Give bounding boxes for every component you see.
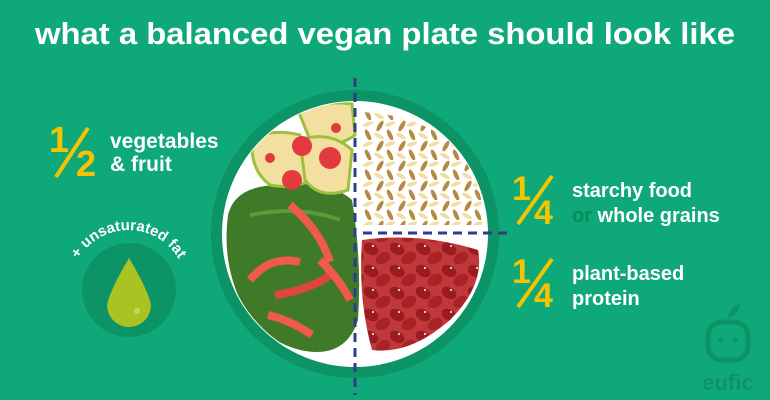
label: half vegetables <box>49 119 219 184</box>
spinach and peppers <box>226 184 359 352</box>
icon: unsaturated fat drop <box>72 221 186 337</box>
plate <box>211 78 510 395</box>
grains quadrant <box>362 112 482 225</box>
fruit <box>252 103 355 193</box>
label: starchy food: 1 <box>512 170 531 208</box>
beans quadrant <box>361 238 479 351</box>
label: half vegetables: 1 <box>49 119 69 160</box>
label: half vegetables: 2 <box>76 143 96 184</box>
logo: eufic <box>702 304 754 395</box>
label: starchy food: or whole grains <box>572 205 720 227</box>
logo: eufic: eufic <box>702 370 754 395</box>
label: plant-based protein <box>512 253 684 315</box>
divider lines <box>355 78 510 395</box>
label: half vegetables: vegetables <box>110 130 219 153</box>
label: starchy food <box>512 170 720 232</box>
label: plant-based protein: 4 <box>534 277 553 315</box>
icon: unsaturated fat drop: + unsaturated fat <box>72 221 186 259</box>
title: what a balanced vegan plate should look like <box>34 16 735 51</box>
label: plant-based protein: plant-based <box>572 263 684 285</box>
label: plant-based protein: 1 <box>512 253 531 291</box>
label: plant-based protein: protein <box>572 288 640 310</box>
label: half vegetables: & fruit <box>110 153 172 176</box>
label: starchy food: 4 <box>534 194 553 232</box>
label: starchy food: starchy food <box>572 180 692 202</box>
